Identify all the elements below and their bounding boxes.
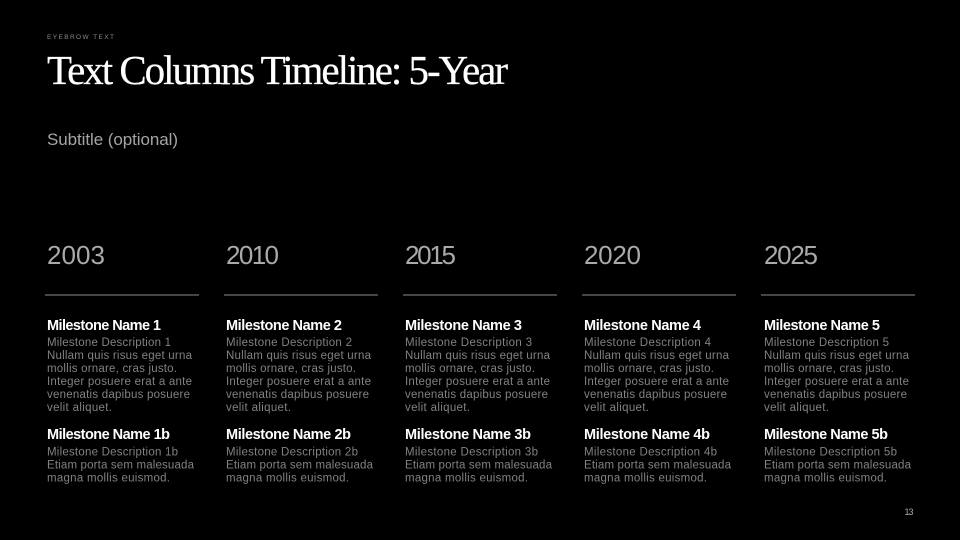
column 2: 2010 — [224, 240, 378, 484]
title: Text Columns Timeline: 5-Year — [47, 47, 508, 93]
milestone 4: venenatis dapibus posuere — [584, 389, 727, 401]
milestone 4b — [584, 427, 732, 484]
milestone 1 — [47, 318, 193, 414]
milestone 2b: Milestone Name 2b — [226, 427, 351, 443]
milestone 1b — [47, 427, 195, 484]
milestone 5: venenatis dapibus posuere — [764, 389, 907, 401]
milestone 3: Milestone Name 3 — [405, 318, 522, 334]
column 4: 2020 — [582, 240, 736, 484]
milestone 1: Integer posuere erat a ante — [47, 376, 192, 388]
milestone 3: velit aliquet. — [405, 402, 470, 414]
milestone 4: velit aliquet. — [584, 402, 649, 414]
milestone 2b: Milestone Description 2b — [226, 446, 358, 458]
milestone 4: mollis ornare, cras justo. — [584, 363, 714, 375]
milestone 1: Nullam quis risus eget urna — [47, 350, 193, 362]
column 1: 2003 — [45, 240, 199, 484]
milestone 3: mollis ornare, cras justo. — [405, 363, 535, 375]
subtitle: Subtitle (optional) — [47, 130, 178, 149]
milestone 5b: magna mollis euismod. — [764, 472, 887, 484]
milestone 5: Integer posuere erat a ante — [764, 376, 909, 388]
year: 2015 — [405, 240, 456, 270]
milestone 5: Milestone Name 5 — [764, 318, 880, 334]
milestone 5b: Milestone Name 5b — [764, 427, 888, 443]
milestone 3: Milestone Description 3 — [405, 337, 532, 349]
milestone 3b — [405, 427, 553, 484]
milestone 1b: Milestone Description 1b — [47, 446, 178, 458]
milestone 4: Milestone Name 4 — [584, 318, 701, 334]
milestone 4b: magna mollis euismod. — [584, 472, 707, 484]
milestone 1: Milestone Description 1 — [47, 337, 171, 349]
year: 2003 — [47, 240, 105, 270]
milestone 2: Milestone Name 2 — [226, 318, 342, 334]
year: 2020 — [584, 240, 641, 270]
milestone 2: Integer posuere erat a ante — [226, 376, 371, 388]
milestone 3b: Milestone Name 3b — [405, 427, 531, 443]
milestone 5: Nullam quis risus eget urna — [764, 350, 910, 362]
milestone 3b: Etiam porta sem malesuada — [405, 460, 553, 472]
milestone 2b: Etiam porta sem malesuada — [226, 460, 374, 472]
milestone 5b: Milestone Description 5b — [764, 446, 897, 458]
milestone 2: mollis ornare, cras justo. — [226, 363, 356, 375]
milestone 1b: Etiam porta sem malesuada — [47, 460, 195, 472]
milestone 3b: Milestone Description 3b — [405, 446, 538, 458]
milestone 4: Integer posuere erat a ante — [584, 376, 729, 388]
milestone 5: velit aliquet. — [764, 402, 829, 414]
milestone 5: Milestone Description 5 — [764, 337, 889, 349]
milestone 5b: Etiam porta sem malesuada — [764, 460, 912, 472]
milestone 1: venenatis dapibus posuere — [47, 389, 190, 401]
milestone 4: Nullam quis risus eget urna — [584, 350, 730, 362]
milestone 5 — [764, 318, 910, 414]
milestone 4 — [584, 318, 730, 414]
milestone 3: Nullam quis risus eget urna — [405, 350, 551, 362]
milestone 1b: Milestone Name 1b — [47, 427, 170, 443]
page number: 13 — [904, 507, 914, 517]
milestone 2: Nullam quis risus eget urna — [226, 350, 372, 362]
year: 2010 — [226, 240, 279, 270]
milestone 1: Milestone Name 1 — [47, 318, 161, 334]
milestone 2 — [226, 318, 372, 414]
milestone 4b: Milestone Description 4b — [584, 446, 717, 458]
column 5: 2025 — [761, 240, 915, 484]
column 3: 2015 — [403, 240, 557, 484]
year: 2025 — [764, 240, 818, 270]
milestone 3: Integer posuere erat a ante — [405, 376, 550, 388]
milestone 5: mollis ornare, cras justo. — [764, 363, 894, 375]
milestone 1b: magna mollis euismod. — [47, 472, 170, 484]
milestone 2b — [226, 427, 374, 484]
milestone 2b: magna mollis euismod. — [226, 472, 349, 484]
milestone 1: mollis ornare, cras justo. — [47, 363, 177, 375]
milestone 4: Milestone Description 4 — [584, 337, 712, 349]
milestone 3 — [405, 318, 551, 414]
milestone 2: venenatis dapibus posuere — [226, 389, 369, 401]
milestone 3: venenatis dapibus posuere — [405, 389, 548, 401]
milestone 4b: Etiam porta sem malesuada — [584, 460, 732, 472]
milestone 3b: magna mollis euismod. — [405, 472, 528, 484]
milestone 2: velit aliquet. — [226, 402, 291, 414]
milestone 2: Milestone Description 2 — [226, 337, 352, 349]
milestone 4b: Milestone Name 4b — [584, 427, 710, 443]
eyebrow: EYEBROW TEXT — [47, 34, 114, 41]
milestone 5b — [764, 427, 912, 484]
milestone 1: velit aliquet. — [47, 402, 112, 414]
